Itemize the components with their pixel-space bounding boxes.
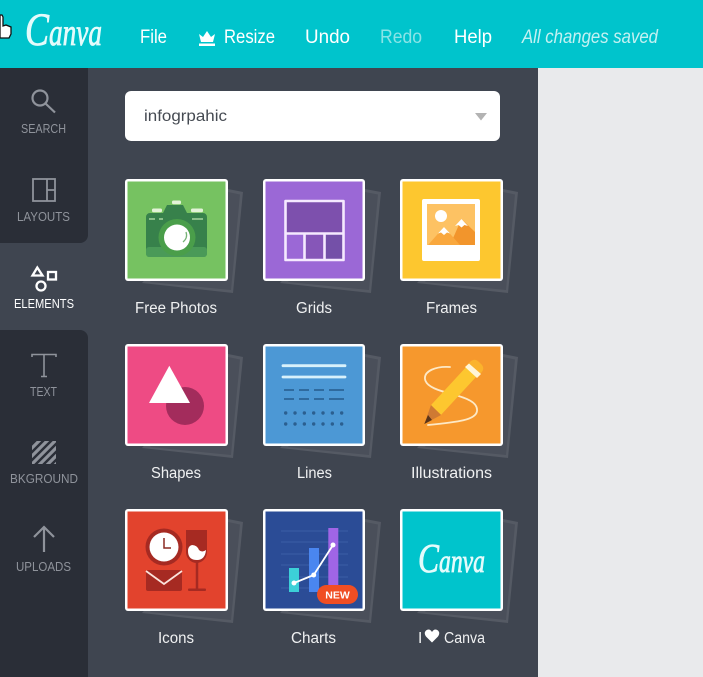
stacked sheets bbox=[417, 354, 518, 458]
elements panel background bbox=[0, 68, 538, 677]
canvas area background bbox=[538, 68, 703, 677]
NEW badge: NEW bbox=[325, 590, 350, 602]
stacked sheets bbox=[280, 354, 381, 458]
menu: Undo: Undo bbox=[305, 27, 350, 48]
icon: dropdown arrow bbox=[475, 113, 487, 120]
icon: line styles bbox=[283, 366, 345, 424]
Canva logo: anva bbox=[439, 544, 485, 580]
icon: shapes bbox=[32, 268, 56, 290]
Canva logo bbox=[418, 535, 485, 581]
save status: All changes saved bbox=[521, 27, 659, 48]
category dropdown: infogrpahic bbox=[144, 108, 227, 125]
tab: text bbox=[30, 354, 57, 399]
tab: search: SEARCH bbox=[21, 122, 66, 136]
stacked sheets bbox=[417, 189, 518, 293]
stacked sheets bbox=[142, 354, 243, 458]
tile: Icons: Icons bbox=[158, 630, 194, 647]
icon: up arrow bbox=[34, 527, 54, 552]
Canva logo: C bbox=[25, 4, 49, 56]
tab: uploads: UPLOADS bbox=[16, 560, 71, 574]
tab: layouts bbox=[17, 179, 70, 224]
tile: Grids: Grids bbox=[296, 300, 332, 317]
icon: crown bbox=[199, 31, 215, 46]
tab: search bbox=[21, 90, 66, 136]
icon: picture frame bbox=[422, 199, 480, 261]
tab: uploads bbox=[16, 527, 71, 574]
icon: pencil with squiggle bbox=[424, 360, 483, 425]
tile: Charts bbox=[263, 509, 381, 647]
icon: magnifier bbox=[32, 90, 55, 112]
tile: Frames bbox=[400, 179, 518, 317]
caption with heart: I bbox=[418, 630, 422, 647]
tile: Shapes: Shapes bbox=[151, 465, 201, 482]
tile: I love Canva bbox=[400, 509, 518, 647]
tab: elements (active) bbox=[14, 268, 74, 311]
icon: stripes bbox=[32, 441, 56, 464]
menu: Resize: Resize bbox=[224, 27, 275, 48]
tile: Shapes bbox=[125, 344, 243, 482]
sidebar bottom block bbox=[0, 330, 88, 677]
tile: Charts: Charts bbox=[291, 630, 336, 647]
stacked sheets bbox=[280, 189, 381, 293]
menu: File: File bbox=[140, 27, 167, 48]
stacked sheets bbox=[142, 519, 243, 623]
top navigation bar bbox=[0, 0, 703, 68]
stacked sheets bbox=[142, 189, 243, 293]
icon: grid layout bbox=[286, 201, 344, 260]
tile: Free Photos: Free Photos bbox=[135, 300, 217, 317]
tile: Illustrations bbox=[400, 344, 518, 482]
tile: Lines: Lines bbox=[297, 465, 332, 482]
sidebar top block bbox=[0, 68, 88, 243]
tile: Frames: Frames bbox=[426, 300, 477, 317]
tile: Illustrations: Illustrations bbox=[411, 465, 492, 482]
menu: Help: Help bbox=[454, 27, 492, 48]
tab: text: TEXT bbox=[30, 385, 57, 399]
tile: I love Canva: Canva bbox=[444, 630, 485, 647]
stacked sheets bbox=[280, 519, 381, 623]
tile: Free Photos bbox=[125, 179, 243, 317]
tab: elements (active): ELEMENTS bbox=[14, 297, 74, 311]
tab: background: BKGROUND bbox=[10, 472, 78, 486]
icon: camera bbox=[146, 200, 207, 257]
icon: heart bbox=[425, 630, 439, 642]
icon: hand cursor bbox=[0, 15, 11, 38]
icon: triangle and circle bbox=[149, 366, 204, 425]
tile: Lines bbox=[263, 344, 381, 482]
tab: background bbox=[11, 441, 78, 483]
category dropdown bbox=[125, 91, 500, 141]
tile: Grids bbox=[263, 179, 381, 317]
icon: letter T bbox=[32, 354, 56, 376]
Canva logo bbox=[25, 4, 102, 56]
icon: clock, envelope and wine glass bbox=[146, 528, 207, 591]
tab: layouts: LAYOUTS bbox=[17, 210, 70, 224]
menu: Redo: Redo bbox=[380, 27, 422, 48]
stacked sheets bbox=[417, 519, 518, 623]
Canva logo: anva bbox=[49, 12, 102, 54]
Canva logo: C bbox=[418, 535, 439, 581]
tile: Icons bbox=[125, 509, 243, 647]
icon: layout bbox=[33, 179, 55, 201]
